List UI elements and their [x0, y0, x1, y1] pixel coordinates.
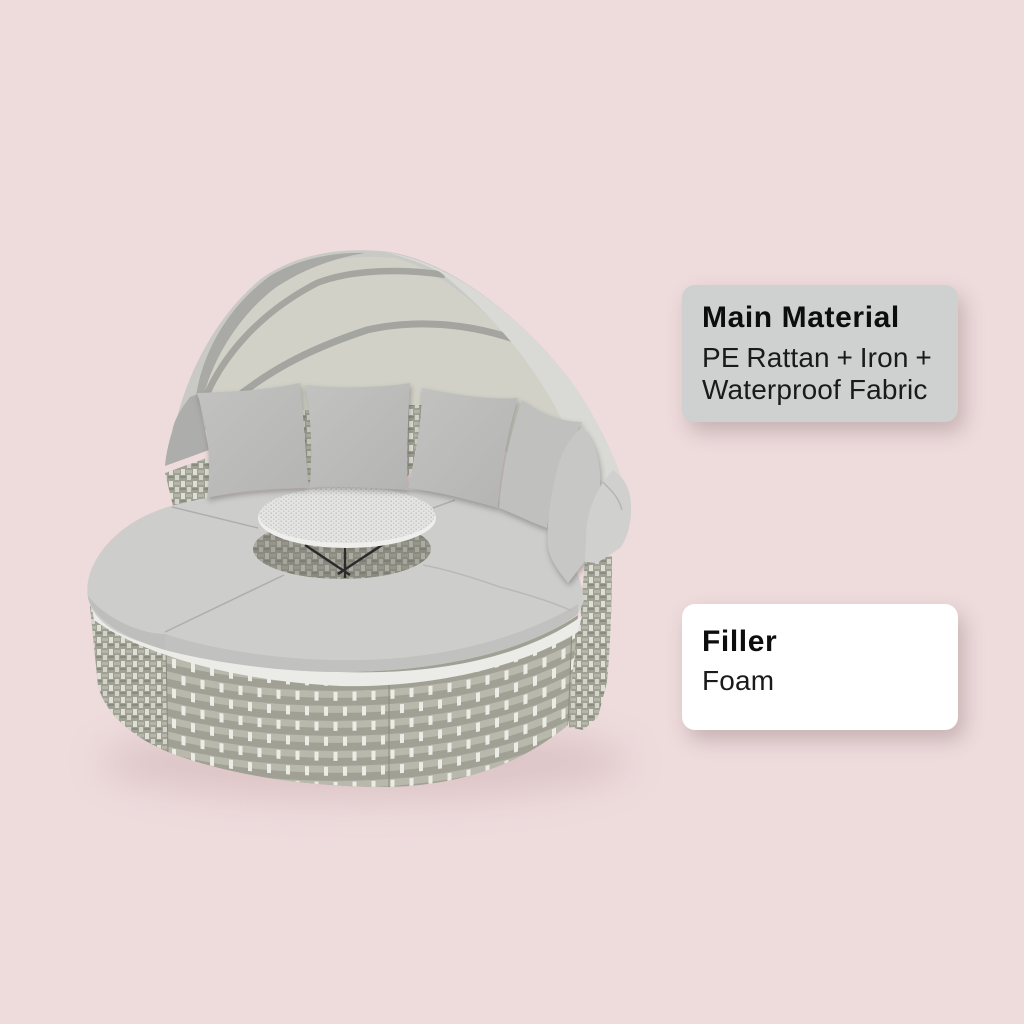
canopy rib lower [237, 324, 535, 397]
flap fold [603, 482, 622, 510]
canopy [172, 250, 625, 540]
cushion surface [87, 488, 584, 672]
text: main material value: Waterproof Fabric [702, 374, 928, 404]
pillow 2 [305, 383, 410, 490]
illustration: round rattan daybed with canopy [87, 250, 631, 806]
pillow 5 side [548, 427, 600, 583]
left cushion lower edge [88, 596, 165, 650]
inner well [253, 532, 431, 579]
pillow 1 [197, 383, 309, 498]
heading: filler: Filler [702, 625, 777, 658]
wicker seams [166, 628, 572, 787]
well shade [253, 532, 431, 579]
text: main material value [702, 342, 932, 405]
cushion seams [165, 500, 455, 632]
heading: main material: Main Material [702, 301, 900, 334]
canopy inner fabric [199, 257, 582, 470]
wicker white weave dashes [96, 634, 575, 787]
rear wicker between pillows [295, 405, 424, 485]
text: filler value: Foam [702, 665, 774, 696]
right canopy flap [585, 470, 631, 563]
table top [259, 487, 435, 543]
card: main material [682, 285, 958, 422]
left canopy flap [165, 394, 209, 466]
rear wicker left [165, 456, 212, 506]
right post [568, 556, 612, 730]
ground shadow [100, 724, 630, 800]
table rim [258, 488, 436, 548]
canopy outer shell [172, 250, 625, 540]
canopy rib upper [207, 271, 445, 394]
white trim band [92, 608, 582, 686]
canopy front lip [385, 252, 625, 490]
wicker left segment [90, 606, 168, 752]
table legs [305, 543, 385, 578]
table [258, 487, 436, 548]
flap body [585, 470, 631, 563]
right cushion seam [423, 565, 572, 611]
pillows [197, 383, 600, 583]
pillow 3 [408, 388, 518, 508]
wicker light strands [166, 633, 576, 787]
wicker base [90, 606, 578, 787]
canopy left edge band [196, 253, 365, 396]
seat cushions disc [87, 488, 584, 672]
card: filler [682, 604, 958, 730]
text: main material value: PE Rattan + Iron + [702, 342, 932, 373]
cushion lower edge [165, 604, 578, 672]
pillow 4 [499, 400, 582, 528]
